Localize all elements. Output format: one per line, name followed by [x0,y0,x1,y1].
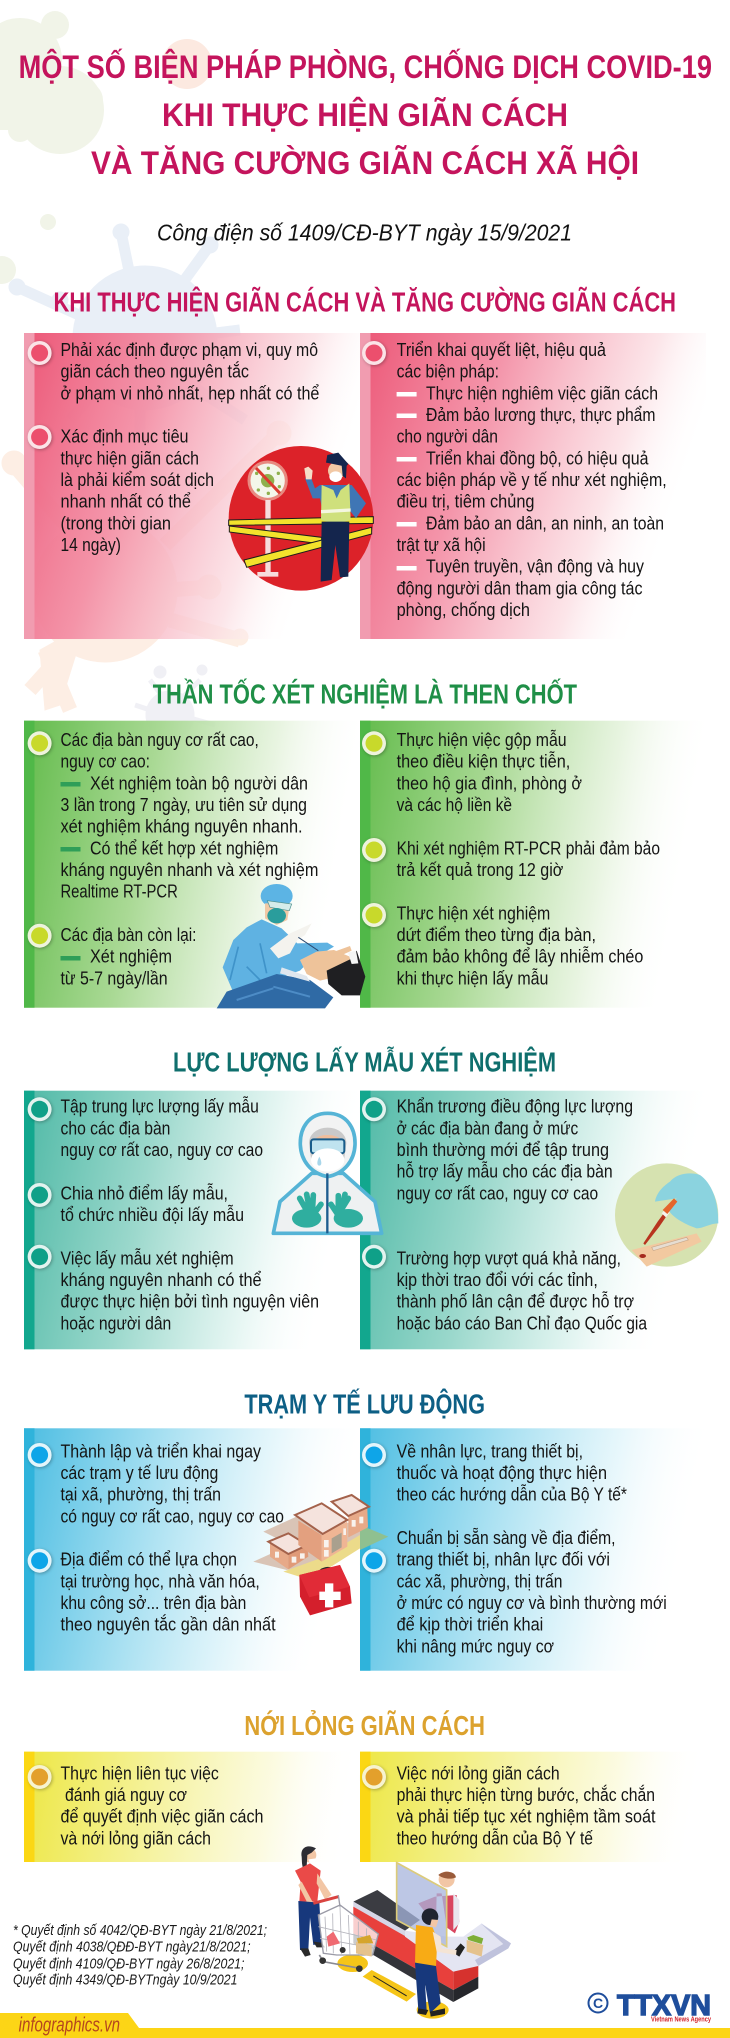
text block: theo nguyên tắc gần dân nhất [60,1614,276,1635]
text block [60,729,318,988]
text block: kịp thời trao đổi với các tỉnh, [397,1269,598,1290]
text block: Thực hiện nghiêm việc giãn cách [426,382,658,403]
text block: xét nghiệm kháng nguyên nhanh. [60,816,303,837]
text block: Triển khai đồng bộ, có hiệu quả [426,447,649,468]
text block: Tập trung lực lượng lấy mẫu [60,1096,259,1117]
text block: Triển khai quyết liệt, hiệu quả [397,339,607,360]
text block: trả kết quả trong 12 giờ [397,859,563,880]
panel: left blue [24,1428,360,1671]
text block: Khi xét nghiệm RT-PCR phải đảm bảo [397,837,660,858]
text block: giãn cách theo nguyên tắc [60,361,249,382]
text block: Thực hiện việc gộp mẫu [397,729,567,750]
text block: Chuẩn bị sẵn sàng về địa điểm, [397,1527,616,1548]
text block: các xã, phường, thị trấn [397,1570,562,1591]
text block: nguy cơ cao: [60,751,150,772]
panel: left red [24,333,360,639]
text block [397,729,660,988]
bullets [362,731,386,927]
icon: mobile clinic building and first-aid kit [253,1495,388,1615]
text block: 14 ngày) [60,534,121,555]
text block: tại trường học, nhà văn hóa, [60,1570,260,1591]
text block: Realtime RT-PCR [60,881,178,902]
text block: bình thường mới để tập trung [397,1139,609,1160]
text block: Việc nới lỏng giãn cách [397,1762,560,1783]
text block: Xét nghiệm toàn bộ người dân [90,772,308,793]
text block: trang thiết bị, nhân lực đối với [397,1549,610,1570]
text block: theo điều kiện thực tiễn, [397,751,570,772]
text block: Khẩn trương điều động lực lượng [397,1096,633,1117]
text block: Đảm bảo lương thực, thực phẩm [426,404,656,425]
text block: Các địa bàn còn lại: [60,924,196,945]
dashes [60,782,80,960]
text block: Xét nghiệm [90,946,172,967]
text block: cho các địa bàn [60,1117,170,1138]
text block: các biện pháp về y tế như xét nghiệm, [397,469,667,490]
subtitle: Công điện số 1409/CĐ-BYT ngày 15/9/2021 [157,220,572,246]
text block: điều trị, tiêm chủng [397,491,534,512]
text block: và phải tiếp tục xét nghiệm tầm soát [397,1806,656,1827]
heading: nới lỏng giãn cách: NỚI LỎNG GIÃN CÁCH [244,1709,485,1741]
panel: left yellow [24,1752,360,1862]
text block: từ 5-7 ngày/lần [60,967,168,988]
bullets [28,341,52,449]
text block: Đảm bảo an dân, an ninh, an toàn [426,512,664,533]
text block: đánh giá nguy cơ [65,1784,187,1805]
bullets [362,1443,386,1573]
footnote: Quyết định 4038/QĐĐ-BYT ngày21/8/2021; [13,1939,250,1956]
text block: Các địa bàn nguy cơ rất cao, [60,729,259,750]
bullet [362,341,386,365]
text block: các biện pháp: [397,361,499,382]
text block: Xác định mục tiêu [60,426,188,447]
text block: theo các hướng dẫn của Bộ Y tế* [397,1484,627,1505]
text block: theo hộ gia đình, phòng ở [397,772,582,793]
text block: khi thực hiện lấy mẫu [397,967,548,988]
text block: Chia nhỏ điểm lấy mẫu, [60,1182,228,1203]
text block: hoặc báo cáo Ban Chỉ đạo Quốc gia [397,1312,648,1333]
text block: Tuyên truyền, vận động và huy [426,556,645,577]
footer band with site name: infographics.vn [19,2014,120,2036]
text block: Địa điểm có thể lựa chọn [60,1549,237,1570]
text block: để kịp thời triển khai [397,1614,543,1635]
text block [60,1096,319,1333]
text block: nguy cơ rất cao, nguy cơ cao [397,1182,598,1203]
icon: medic in protective suit [273,1113,382,1233]
footnote: Quyết định 4109/QĐ-BYT ngày 26/8/2021; [13,1955,244,1972]
heading: trạm y tế lưu động: TRẠM Y TẾ LƯU ĐỘNG [244,1387,485,1419]
text block [60,1440,284,1635]
text block: phòng, chống dịch [397,599,530,620]
panel: right green [360,721,706,1008]
dashes [397,392,417,570]
bullets [28,1443,52,1573]
text block: ở các địa bàn đang ở mức [397,1117,578,1138]
footer band with site name [0,2013,730,2038]
bullets [28,731,52,948]
text block [397,339,667,620]
text block [60,1762,264,1848]
title: KHI THỰC HIỆN GIÃN CÁCH [162,96,568,133]
text block: ở mức có nguy cơ và bình thường mới [397,1592,667,1613]
panel: left teal [24,1091,360,1349]
text block: nhanh nhất có thể [60,491,191,512]
text block: kháng nguyên nhanh và xét nghiệm [60,859,318,880]
bullet [362,1765,386,1789]
text block: là phải kiểm soát dịch [60,469,214,490]
logo: TTXVN: Vietnam News Agency [651,2016,711,2024]
text block: cho người dân [397,426,498,447]
panel: left green [24,721,360,1008]
heading: thần tốc xét nghiệm: THẦN TỐC XÉT NGHIỆM LÀ THEN CHỐT [153,677,577,709]
text block: tổ chức nhiều đội lấy mẫu [60,1204,244,1225]
text block: đảm bảo không để lây nhiễm chéo [397,946,643,967]
text block: Phải xác định được phạm vi, quy mô [60,339,318,360]
logo: TTXVN: C [593,1995,603,2011]
text block: dứt điểm theo từng địa bàn, [397,924,596,945]
text block: Việc lấy mẫu xét nghiệm [60,1247,234,1268]
text block: tại xã, phường, thị trấn [60,1484,221,1505]
panel: right red [360,333,706,639]
panel: right teal [360,1091,706,1349]
logo: TTXVN: TTXVN [617,1990,711,2022]
text block: Thực hiện liên tục việc [60,1762,219,1783]
icon: supermarket checkout scene [295,1846,511,2019]
text block: (trong thời gian [60,512,171,533]
text block: phải thực hiện từng bước, chắc chắn [397,1784,655,1805]
text block: 3 lần trong 7 ngày, ưu tiên sử dụng [60,794,307,815]
text block: kháng nguyên nhanh có thể [60,1269,262,1290]
text block [397,1762,656,1848]
bullets [362,1097,386,1269]
text block: khu công sở... trên địa bàn [60,1592,246,1613]
text block: để quyết định việc giãn cách [60,1806,264,1827]
text block: được thực hiện bởi tình nguyện viên [60,1291,319,1312]
footnote: * Quyết định số 4042/QĐ-BYT ngày 21/8/2021; [13,1922,267,1939]
text block: Thực hiện xét nghiệm [397,902,550,923]
panel: right blue [360,1428,706,1671]
heading: lực lượng lấy mẫu: LỰC LƯỢNG LẤY MẪU XÉT NGHIỆM [173,1047,556,1078]
title [19,47,712,181]
text block: theo hướng dẫn của Bộ Y tế [397,1827,594,1848]
text block: hoặc người dân [60,1312,171,1333]
text block: nguy cơ rất cao, nguy cơ cao [60,1139,263,1160]
text block: hỗ trợ lấy mẫu cho các địa bàn [397,1161,613,1182]
bullets [28,1097,52,1269]
text block: Về nhân lực, trang thiết bị, [397,1440,583,1461]
text block: thuốc và hoạt động thực hiện [397,1462,607,1483]
text block: và các hộ liền kề [397,794,512,815]
text block: và nới lỏng giãn cách [60,1827,211,1848]
text block: ở phạm vi nhỏ nhất, hẹp nhất có thể [60,382,319,403]
text block [397,1440,667,1656]
panel: right yellow [360,1752,706,1862]
text block [397,1096,648,1333]
bullet [28,1765,52,1789]
text block: Có thể kết hợp xét nghiệm [90,837,278,858]
text block: thành phố lân cận để được hỗ trợ [397,1291,634,1312]
background viruses [0,11,291,739]
icon: gloved hand with test cassette [615,1163,718,1267]
text block: thực hiện giãn cách [60,447,199,468]
footnote [13,1922,267,1988]
text block: trật tự xã hội [397,534,486,555]
icon: police officer at barrier [229,446,373,591]
text block: Thành lập và triển khai ngay [60,1440,262,1461]
text block: các trạm y tế lưu động [60,1462,218,1483]
title: VÀ TĂNG CƯỜNG GIÃN CÁCH XÃ HỘI [91,143,639,181]
text block: động người dân tham gia công tác [397,577,642,598]
footnote: Quyết định 4349/QĐ-BYTngày 10/9/2021 [13,1971,237,1988]
text block [60,339,319,555]
text block: có nguy cơ rất cao, nguy cơ cao [60,1505,284,1526]
text block: khi nâng mức nguy cơ [397,1635,554,1656]
icon: medic taking nasal swab [217,884,365,1008]
text block: Trường hợp vượt quá khả năng, [397,1247,621,1268]
